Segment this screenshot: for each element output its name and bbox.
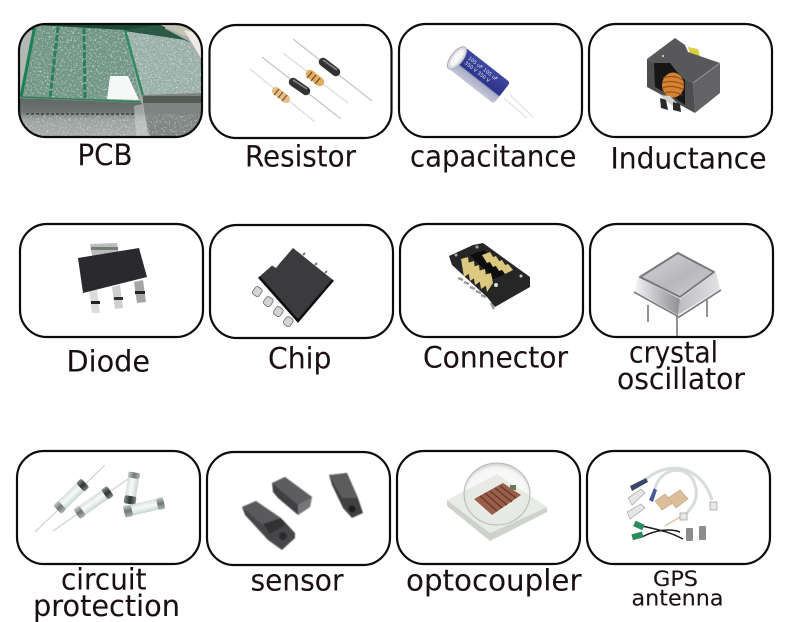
icon: board-to-board connector (449, 243, 530, 309)
icon: electrolytic capacitor: 350 V 350 V (463, 60, 491, 84)
panel: PCB (19, 22, 202, 172)
panel: circuit protection (17, 451, 200, 622)
icon: crystal oscillator can (634, 253, 721, 336)
frame (587, 451, 770, 564)
frame (399, 24, 582, 137)
frame (207, 452, 390, 565)
label (632, 567, 724, 612)
label: Diode (66, 344, 150, 378)
icon: four resistors (250, 39, 372, 122)
panel: GPS antenna (587, 451, 770, 612)
frame (19, 24, 202, 137)
panel: capacitance (399, 24, 582, 174)
frame (589, 24, 772, 137)
label: antenna (632, 586, 724, 612)
label: GPS (653, 567, 698, 591)
icon: LED optocoupler package (447, 463, 547, 541)
label: Connector (423, 340, 568, 374)
label: optocoupler (406, 564, 582, 598)
label: crystal (629, 336, 718, 370)
icon: GPS antenna set (627, 468, 717, 541)
frame (210, 225, 393, 338)
label: Inductance (610, 142, 766, 176)
label: oscillator (617, 362, 745, 396)
label: Chip (268, 342, 332, 376)
panel: Diode (20, 224, 203, 378)
panel: Inductance (589, 24, 772, 176)
icon: SOP-8 chip (251, 248, 333, 328)
label: circuit (61, 562, 146, 596)
label: capacitance (410, 140, 576, 174)
icon: three sensor modules (242, 473, 363, 550)
frame (20, 224, 203, 337)
panel: crystal oscillator (590, 224, 773, 396)
panel: Connector (400, 224, 583, 374)
icon: electrolytic capacitor (444, 44, 533, 118)
frame (590, 224, 773, 337)
photo: stacked PCB boards (19, 22, 202, 137)
label: protection (33, 589, 180, 622)
icon: SOT-223 diode (78, 243, 147, 313)
frame (210, 25, 392, 138)
frame (400, 224, 583, 337)
panel: Chip (210, 225, 393, 376)
label: sensor (250, 564, 344, 598)
panel: sensor (207, 452, 390, 598)
frame (17, 451, 200, 564)
panel: Resistor (210, 25, 392, 174)
label (33, 562, 180, 622)
frame (397, 451, 580, 564)
label: Resistor (245, 140, 356, 174)
icon: electrolytic capacitor: 105 uF 105 uF (467, 56, 499, 83)
icon: inductor (647, 38, 720, 113)
label: PCB (78, 138, 132, 172)
label (617, 336, 745, 396)
panel: optocoupler (397, 451, 582, 598)
icon: glass fuses (35, 465, 165, 532)
